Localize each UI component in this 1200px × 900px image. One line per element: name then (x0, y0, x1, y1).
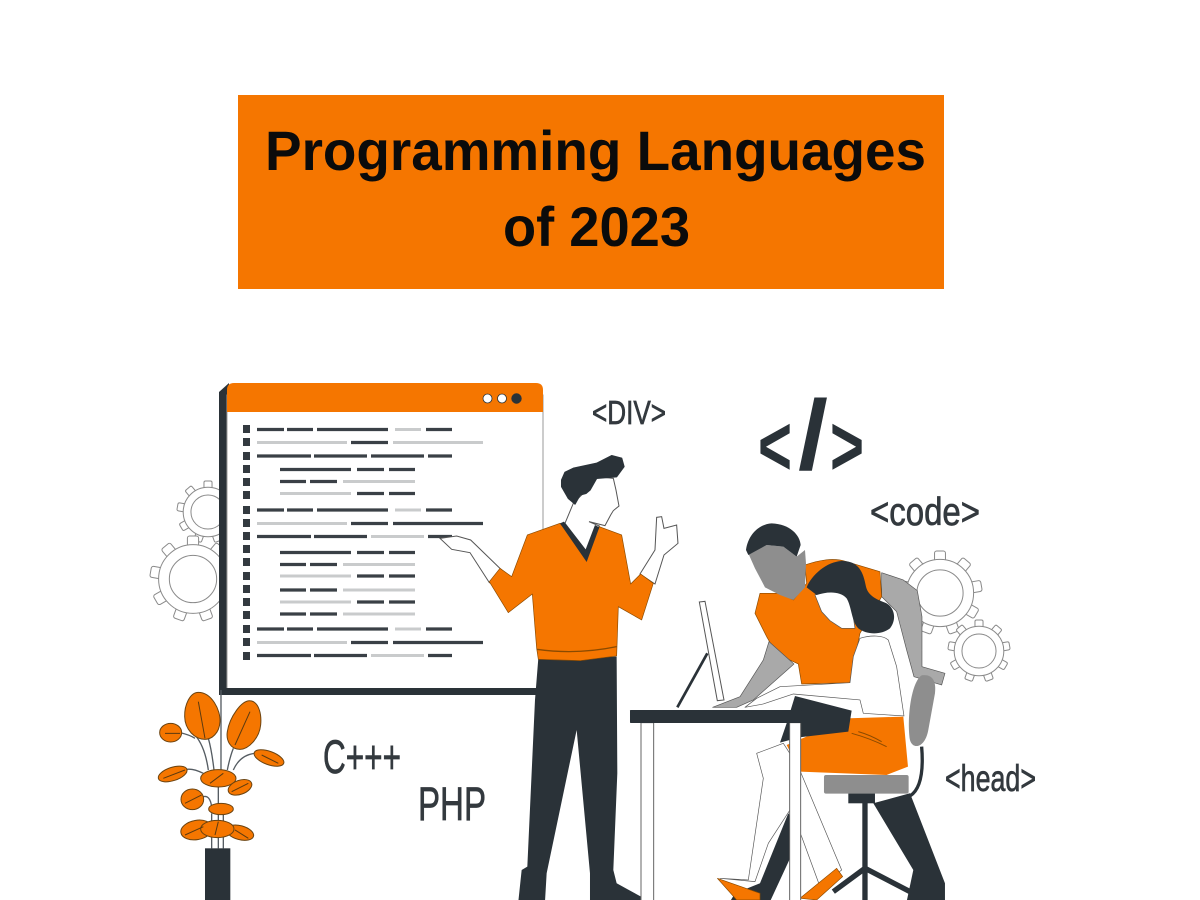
label: code symbol (758, 380, 864, 494)
tablet screen (699, 601, 724, 701)
seated man: trousers (730, 793, 945, 900)
code lines (243, 425, 483, 660)
label: DIV tag: <DIV> (592, 394, 666, 431)
plant stems (180, 690, 255, 848)
man: right arm and hand (640, 517, 678, 584)
seated man: shirt (755, 559, 882, 684)
man: neck and face (565, 477, 619, 552)
woman: legs (720, 743, 842, 887)
tablet stand (677, 653, 707, 707)
title banner (238, 95, 944, 289)
gear: upper right (898, 551, 982, 634)
chair seat (824, 775, 909, 794)
seated man: left arm (713, 642, 794, 707)
desk (630, 710, 802, 900)
woman: shoes (717, 868, 843, 900)
line bullets (243, 425, 250, 660)
dark code segments (257, 430, 483, 656)
label: code symbol: / (798, 380, 828, 490)
seated man: dark lap panel (780, 696, 852, 743)
man: sweater hem (537, 647, 617, 652)
leaf veins (163, 702, 278, 838)
code window (219, 383, 543, 695)
plant pot (205, 848, 230, 900)
gear: lower right (948, 620, 1010, 682)
woman: top and arm (745, 636, 904, 716)
plant (156, 690, 286, 900)
seated man: hair (746, 523, 801, 557)
label: code tag: <code> (870, 491, 980, 534)
label: code symbol: < (758, 399, 792, 494)
man: trousers (518, 657, 644, 900)
title text: Programming Languages (265, 119, 926, 182)
man: sweater (489, 523, 653, 661)
plant leaves (156, 692, 286, 843)
seated man: face (748, 545, 806, 600)
gear: lower left (150, 536, 236, 621)
title text: of 2023 (503, 195, 690, 258)
chair column and legs (833, 793, 910, 900)
window title bar (227, 383, 543, 412)
skirt folds (852, 732, 887, 747)
gear: upper left (177, 481, 239, 543)
title text (265, 119, 926, 258)
label: PHP: PHP (418, 777, 486, 830)
window control dots (483, 394, 521, 403)
label: head tag: <head> (945, 758, 1036, 799)
standing man (440, 456, 678, 900)
desk scene (630, 523, 945, 900)
woman: hair (807, 561, 894, 633)
seated man: right arm (882, 573, 945, 685)
man: collar (560, 522, 599, 562)
man: left arm and hand (440, 536, 502, 583)
label: C+++: C+++ (323, 730, 401, 783)
man: hair (562, 456, 624, 504)
woman: skirt (787, 717, 908, 775)
light code segments (257, 430, 483, 656)
label: code symbol: > (830, 399, 864, 494)
chair back (909, 675, 935, 746)
woman: face (815, 590, 855, 628)
chair base (824, 747, 922, 900)
